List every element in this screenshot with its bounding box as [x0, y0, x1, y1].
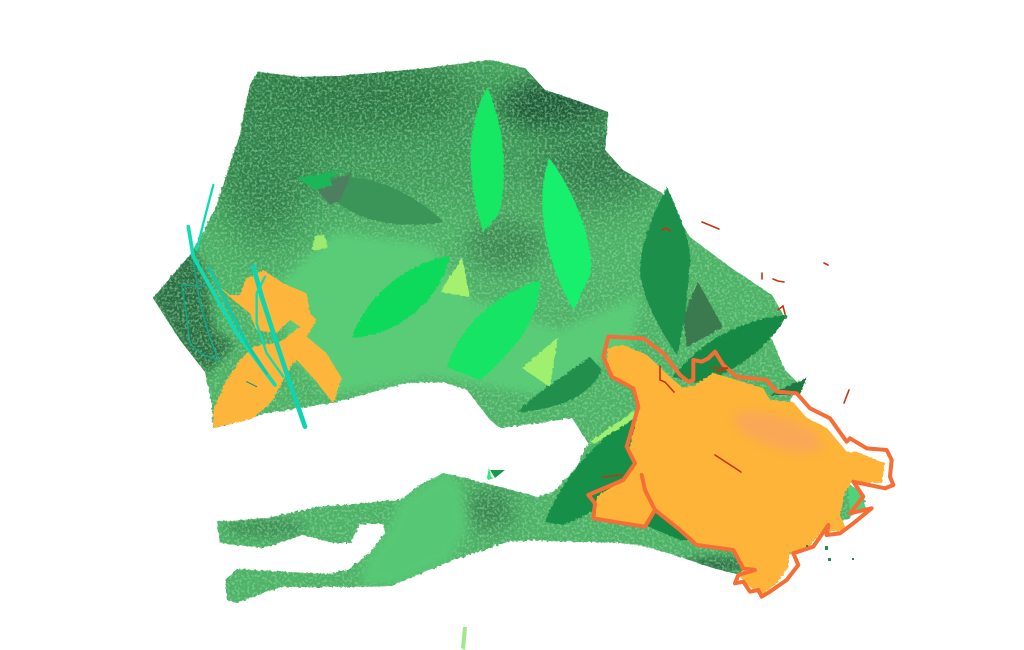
blob: pink-orange tint [729, 403, 827, 461]
panel: green landmass [153, 60, 866, 604]
leaf: green tip of muted leaf [297, 170, 342, 190]
triangle: small lime upper left [312, 234, 328, 250]
leaf: bright center [447, 280, 540, 380]
leaf: dark green lower [545, 415, 640, 525]
illustration: abstract green landmass with leaves and orange blobs [153, 60, 896, 650]
leaf: dark green right [673, 315, 787, 383]
leaf: bright right [542, 158, 591, 310]
triangle: lime sliver [590, 411, 636, 444]
outline: orange contour around blob [588, 337, 893, 597]
leaf: grey patch on muted leaf [315, 173, 352, 205]
leaf: dark green center [517, 357, 602, 412]
triangle: lime center [440, 258, 470, 297]
scribble: teal lines [182, 185, 305, 427]
region: light lower lobe [360, 470, 468, 586]
fragment: small green patch [487, 467, 505, 480]
leaf: bright center left [352, 256, 450, 338]
leaf: bright top center [471, 87, 504, 232]
wedge: dark grey leaf behind [683, 282, 723, 347]
patch: bright green right of orange [848, 483, 866, 514]
region: light central patch [272, 232, 640, 395]
region: dark left edge [150, 240, 235, 375]
blob: large orange right [593, 345, 885, 595]
patch: dark green under orange [645, 505, 700, 540]
speckles: dark green dots [806, 545, 854, 561]
patch: dark tail at right [770, 378, 807, 395]
scribble: red ticks [603, 222, 849, 477]
leaf: muted leaf upper left [316, 177, 444, 225]
blob: orange left [213, 270, 342, 428]
triangle: lime lower [522, 337, 558, 387]
leaf: dark green standing [640, 187, 690, 355]
fragment: bottom lime sliver [461, 627, 467, 650]
